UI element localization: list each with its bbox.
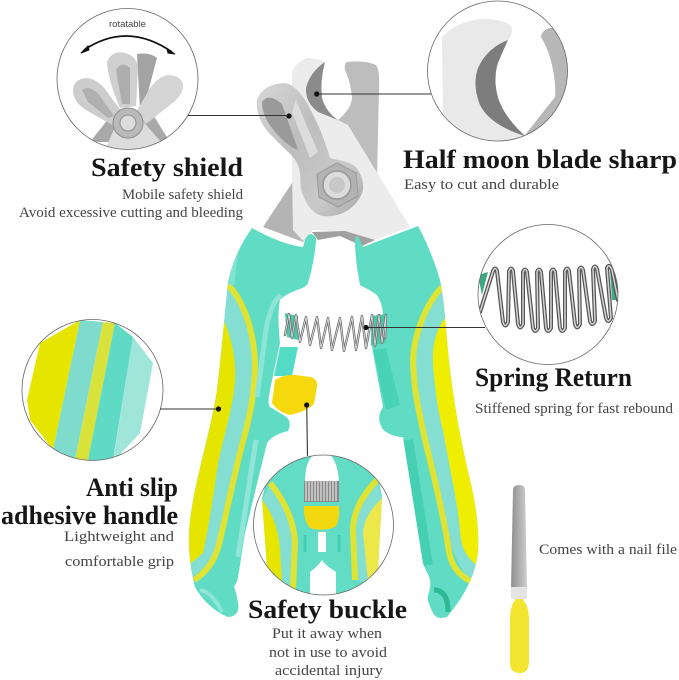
circle: rotatable shield detail <box>57 8 198 150</box>
icon: safety buckle on clipper <box>272 375 317 415</box>
text: anti slip handle: comfortable grip <box>65 554 174 570</box>
text: anti slip handle: Anti slip <box>86 473 178 502</box>
circle: spring detail <box>478 224 618 364</box>
text: safety buckle: accidental injury <box>275 663 384 679</box>
text: spring return: Stiffened spring for fast rebound <box>475 401 674 417</box>
text: safety buckle: Put it away when <box>272 626 383 642</box>
text: anti slip handle: Lightweight and <box>64 529 175 545</box>
leader lines and dots <box>160 91 485 456</box>
icon: nail file <box>510 485 529 673</box>
slider slots and tab <box>274 347 400 410</box>
text: anti slip handle <box>1 473 178 570</box>
arrow: rotation <box>81 36 175 54</box>
text: half moon blade <box>403 145 677 193</box>
safety shield <box>257 83 363 216</box>
text: spring return: Spring Return <box>475 363 633 392</box>
clipper: left handle <box>188 228 316 617</box>
text: safety shield: Avoid excessive cutting and bleeding <box>19 205 243 221</box>
circle: safety buckle detail <box>253 454 394 596</box>
text: safety shield: Safety shield <box>91 153 244 182</box>
rotatable label: rotatable <box>109 19 146 30</box>
text: safety shield: Mobile safety shield <box>122 187 244 203</box>
icon: spring on clipper <box>285 313 386 351</box>
clipper: right handle <box>355 226 478 618</box>
text: safety shield <box>19 153 244 221</box>
circle: anti slip handle detail <box>22 320 163 462</box>
text: half moon blade: Easy to cut and durable <box>404 177 559 193</box>
text: safety buckle: not in use to avoid <box>269 645 388 661</box>
clipper: blades and safety shield <box>257 58 410 246</box>
nut <box>317 163 358 207</box>
circle: half moon blade detail <box>428 1 575 145</box>
text: anti slip handle: adhesive handle <box>1 501 178 530</box>
text: safety buckle <box>248 595 407 679</box>
text: spring return <box>475 363 674 417</box>
text: safety buckle: Safety buckle <box>248 595 407 624</box>
text: nail file: Comes with a nail file <box>539 542 677 558</box>
text: half moon blade: Half moon blade sharp <box>403 145 677 174</box>
